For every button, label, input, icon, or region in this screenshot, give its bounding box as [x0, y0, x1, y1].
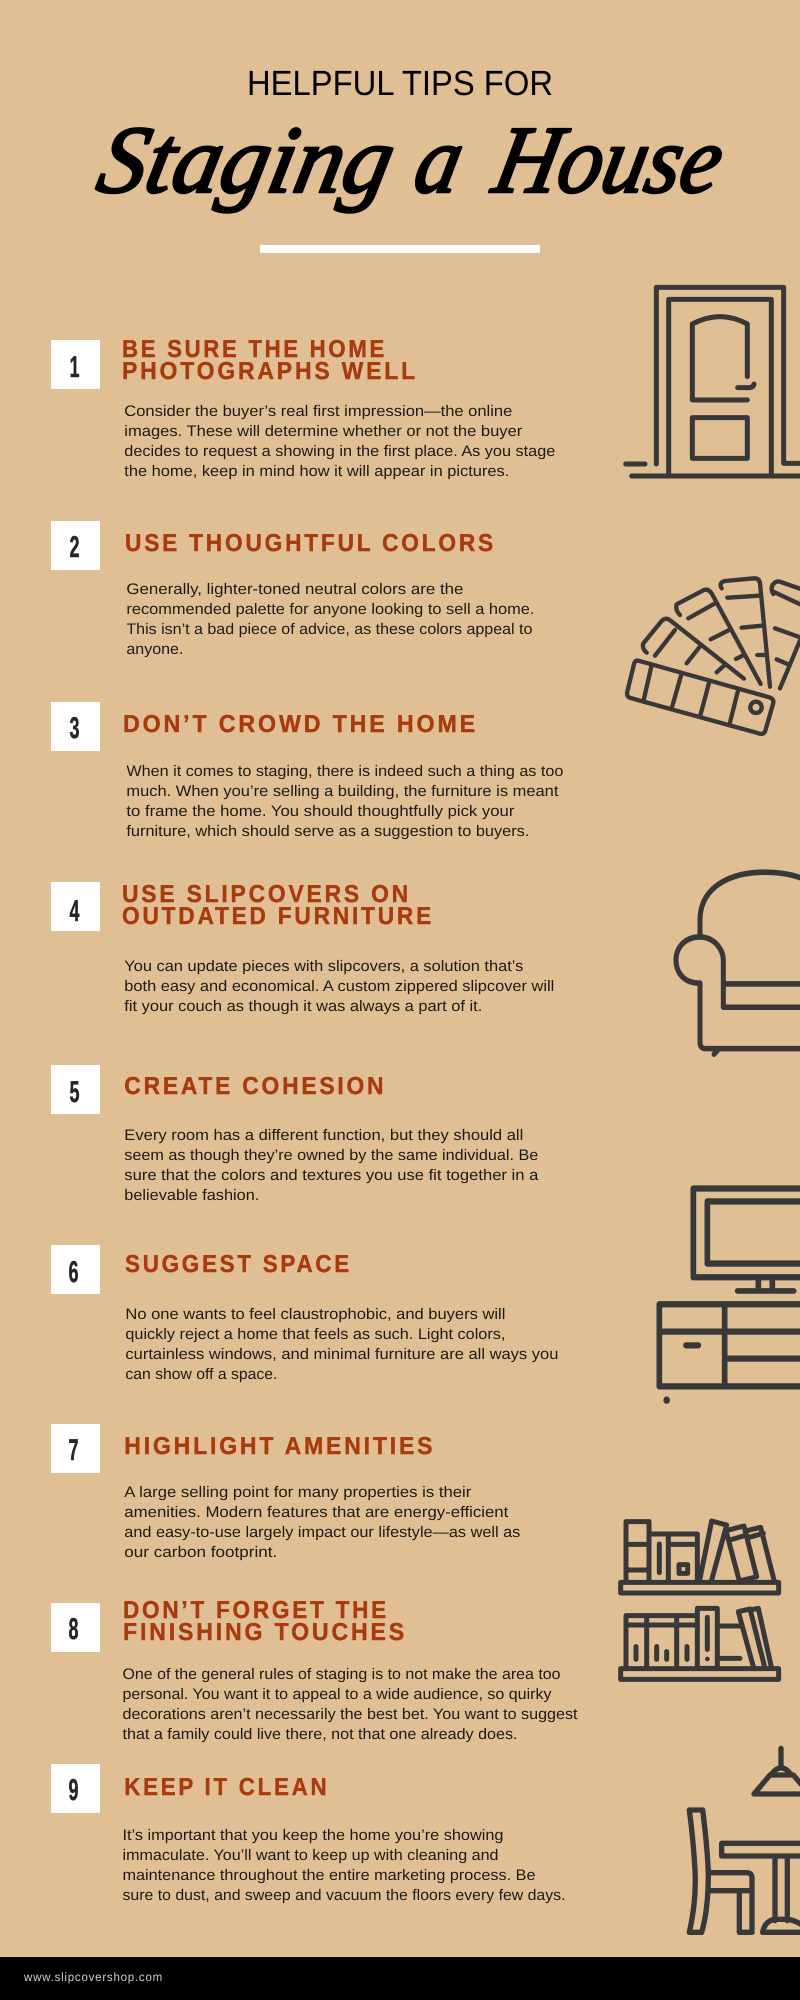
- body 1: images. These will determine whether or not the buyer: [124, 423, 522, 440]
- body 9: It’s important that you keep the home you’re showing: [122, 1827, 504, 1844]
- heading 8: DON’T FORGET THE: [123, 1597, 389, 1624]
- body 6: [125, 1306, 558, 1383]
- body 9: maintenance throughout the entire marketing process. Be: [122, 1867, 536, 1884]
- heading 1: BE SURE THE HOME: [122, 336, 387, 363]
- heading 4: [122, 881, 434, 930]
- title underline bar: [260, 245, 540, 253]
- icon: armchair: [676, 872, 800, 1054]
- icon: dining table, chair and lamp: [689, 1748, 800, 1932]
- body 5: sure that the colors and textures you use fit together in a: [124, 1167, 539, 1184]
- script headline: a: [407, 106, 473, 213]
- number badge 8: 8: [68, 1613, 78, 1646]
- number badge 4: 4: [70, 895, 80, 928]
- body 7: and easy-to-use largely impact our lifestyle—as well as: [124, 1524, 521, 1541]
- body 2: Generally, lighter-toned neutral colors are the: [126, 581, 463, 598]
- body 4: fit your couch as though it was always a part of it.: [124, 998, 482, 1015]
- number badge 1: 1: [70, 351, 80, 384]
- body 7: A large selling point for many properties is their: [124, 1484, 471, 1501]
- number badge 6: [51, 1245, 100, 1294]
- body 1: the home, keep in mind how it will appear in pictures.: [124, 463, 509, 480]
- number badge 1: [51, 340, 100, 389]
- body 5: [124, 1127, 539, 1204]
- number badge 9: 9: [68, 1774, 78, 1807]
- body 3: much. When you’re selling a building, the furniture is meant: [126, 783, 559, 800]
- body 2: This isn’t a bad piece of advice, as these colors appeal to: [126, 621, 532, 638]
- heading 1: [122, 336, 418, 385]
- number badge 7: [51, 1424, 100, 1473]
- panel: tip 6: [51, 1245, 558, 1383]
- heading 7: HIGHLIGHT AMENITIES: [124, 1433, 435, 1460]
- body 6: curtainless windows, and minimal furniture are all ways you: [125, 1346, 558, 1363]
- body 3: to frame the home. You should thoughtfully pick your: [126, 803, 514, 820]
- panel: tip 4: [51, 881, 554, 1015]
- heading 8: FINISHING TOUCHES: [123, 1619, 407, 1646]
- body 9: immaculate. You’ll want to keep up with cleaning and: [122, 1847, 498, 1864]
- body 5: seem as though they’re owned by the same individual. Be: [124, 1147, 538, 1164]
- body 7: amenities. Modern features that are energy-efficient: [124, 1504, 509, 1521]
- icon: bookshelves: [621, 1521, 779, 1679]
- heading 1: PHOTOGRAPHS WELL: [122, 358, 418, 385]
- heading 5: CREATE COHESION: [124, 1073, 386, 1100]
- panel: tip 3: [51, 702, 563, 840]
- body 4: You can update pieces with slipcovers, a solution that’s: [124, 958, 524, 975]
- footer bar: [0, 1957, 800, 2000]
- number badge 8: [51, 1603, 100, 1652]
- heading 9: KEEP IT CLEAN: [124, 1774, 329, 1801]
- body 3: When it comes to staging, there is indeed such a thing as too: [126, 763, 563, 780]
- panel: tip 7: [51, 1424, 521, 1561]
- panel: tip 5: [51, 1065, 539, 1204]
- body 9: sure to dust, and sweep and vacuum the floors every few days.: [122, 1887, 566, 1904]
- panel: tip 8: [51, 1597, 578, 1743]
- body 8: decorations aren’t necessarily the best bet. You want to suggest: [122, 1706, 578, 1723]
- number badge 6: 6: [68, 1256, 78, 1289]
- icon: door: [626, 287, 800, 476]
- body 3: [126, 763, 563, 840]
- title: [90, 64, 733, 213]
- body 6: quickly reject a home that feels as such. Light colors,: [125, 1326, 505, 1343]
- number badge 2: 2: [70, 531, 80, 564]
- script headline: [90, 106, 733, 213]
- body 2: anyone.: [126, 641, 183, 658]
- icon: tv and cabinet: [659, 1188, 800, 1404]
- script headline: Staging: [90, 106, 404, 213]
- body 7: our carbon footprint.: [124, 1544, 277, 1561]
- body 4: [124, 958, 554, 1015]
- number badge 5: [51, 1065, 100, 1114]
- body 4: both easy and economical. A custom zippered slipcover will: [124, 978, 554, 995]
- heading 4: USE SLIPCOVERS ON: [122, 881, 411, 908]
- body 3: furniture, which should serve as a suggestion to buyers.: [126, 823, 529, 840]
- body 8: [122, 1666, 578, 1743]
- body 6: can show off a space.: [125, 1366, 277, 1383]
- icon: paint swatch fan: [627, 578, 800, 734]
- panel: tip 2: [51, 521, 534, 658]
- panel: tip 9: [51, 1764, 566, 1904]
- body 7: [124, 1484, 521, 1561]
- number badge 3: 3: [70, 712, 80, 745]
- number badge 9: [51, 1764, 100, 1813]
- heading 4: OUTDATED FURNITURE: [122, 903, 434, 930]
- body 5: believable fashion.: [124, 1187, 259, 1204]
- body 8: One of the general rules of staging is to not make the area too: [122, 1666, 560, 1683]
- heading 8: [123, 1597, 407, 1646]
- body 2: recommended palette for anyone looking to sell a home.: [126, 601, 534, 618]
- body 8: personal. You want it to appeal to a wide audience, so quirky: [122, 1686, 552, 1703]
- heading 2: USE THOUGHTFUL COLORS: [125, 530, 496, 557]
- subtitle: HELPFUL TIPS FOR: [247, 64, 553, 103]
- panel: tip 1: [51, 336, 555, 480]
- number badge 4: [51, 882, 100, 931]
- number badge 7: 7: [68, 1434, 78, 1467]
- body 6: No one wants to feel claustrophobic, and buyers will: [125, 1306, 505, 1323]
- body 2: [126, 581, 534, 658]
- body 5: Every room has a different function, but they should all: [124, 1127, 523, 1144]
- body 1: decides to request a showing in the first place. As you stage: [124, 443, 555, 460]
- heading 6: SUGGEST SPACE: [125, 1251, 352, 1278]
- heading 3: DON’T CROWD THE HOME: [123, 711, 478, 738]
- number badge 3: [51, 702, 100, 751]
- script headline: House: [484, 106, 733, 213]
- body 9: [122, 1827, 566, 1904]
- body 1: [124, 403, 555, 480]
- body 8: that a family could live there, not that one already does.: [122, 1726, 518, 1743]
- number badge 5: 5: [70, 1076, 80, 1109]
- body 1: Consider the buyer’s real first impression—the online: [124, 403, 512, 420]
- footer url: www.slipcovershop.com: [23, 1970, 163, 1984]
- number badge 2: [51, 521, 100, 570]
